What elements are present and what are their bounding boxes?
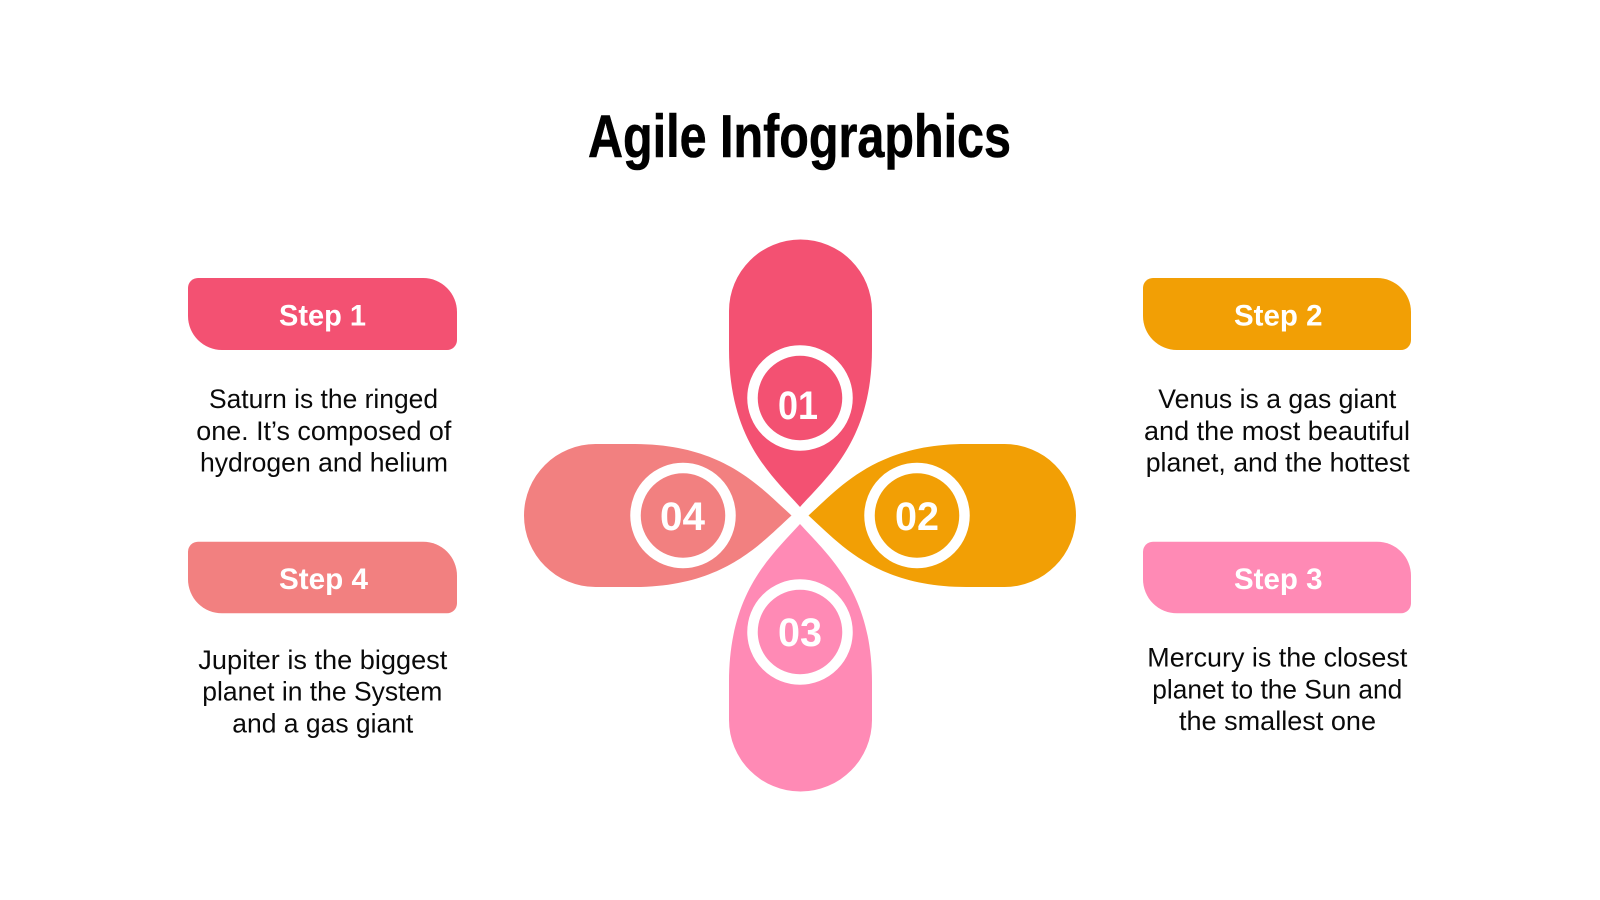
step 1 description: one. It’s composed of <box>196 416 452 446</box>
step 1 description <box>196 384 452 478</box>
step 4 description: and a gas giant <box>232 708 414 738</box>
number ring 01 <box>752 350 848 446</box>
step 4 description: planet in the System <box>202 677 442 707</box>
step 1 description: Saturn is the ringed <box>209 384 438 414</box>
step 1 banner: Step 1 <box>279 300 366 333</box>
petal 02 <box>808 444 1076 587</box>
step 3 banner <box>1143 542 1411 613</box>
step 3 description: Mercury is the closest <box>1147 643 1408 673</box>
step 3 banner: Step 3 <box>1234 563 1322 596</box>
petal 03 <box>729 524 872 792</box>
step 2 description <box>1144 384 1410 478</box>
step 2 description: and the most beautiful <box>1144 416 1410 446</box>
step 2 banner: Step 2 <box>1234 300 1322 333</box>
step 3 description: planet to the Sun and <box>1152 674 1402 704</box>
number ring 04: 04 <box>660 495 706 539</box>
step 3 description: the smallest one <box>1179 706 1376 736</box>
petal 01 <box>729 240 872 507</box>
step 4 description: Jupiter is the biggest <box>198 645 448 675</box>
number ring 03: 03 <box>778 611 822 655</box>
step 1 banner <box>188 278 457 350</box>
number ring 03 <box>752 584 848 680</box>
step 4 banner: Step 4 <box>279 563 368 596</box>
step 4 banner <box>188 542 457 613</box>
step 1 description: hydrogen and helium <box>200 448 448 478</box>
step 2 description: Venus is a gas giant <box>1158 384 1397 414</box>
petal diagram <box>524 240 1076 792</box>
number ring 01: 01 <box>778 384 818 428</box>
number ring 02 <box>870 468 964 563</box>
step 2 description: planet, and the hottest <box>1146 448 1410 478</box>
petal 04 <box>524 444 792 587</box>
number ring 02: 02 <box>895 495 939 539</box>
step 4 description <box>198 645 448 738</box>
number ring 04 <box>636 468 730 563</box>
step 2 banner <box>1143 278 1411 350</box>
step 3 description <box>1147 643 1408 736</box>
title: Agile Infographics <box>588 103 1011 170</box>
